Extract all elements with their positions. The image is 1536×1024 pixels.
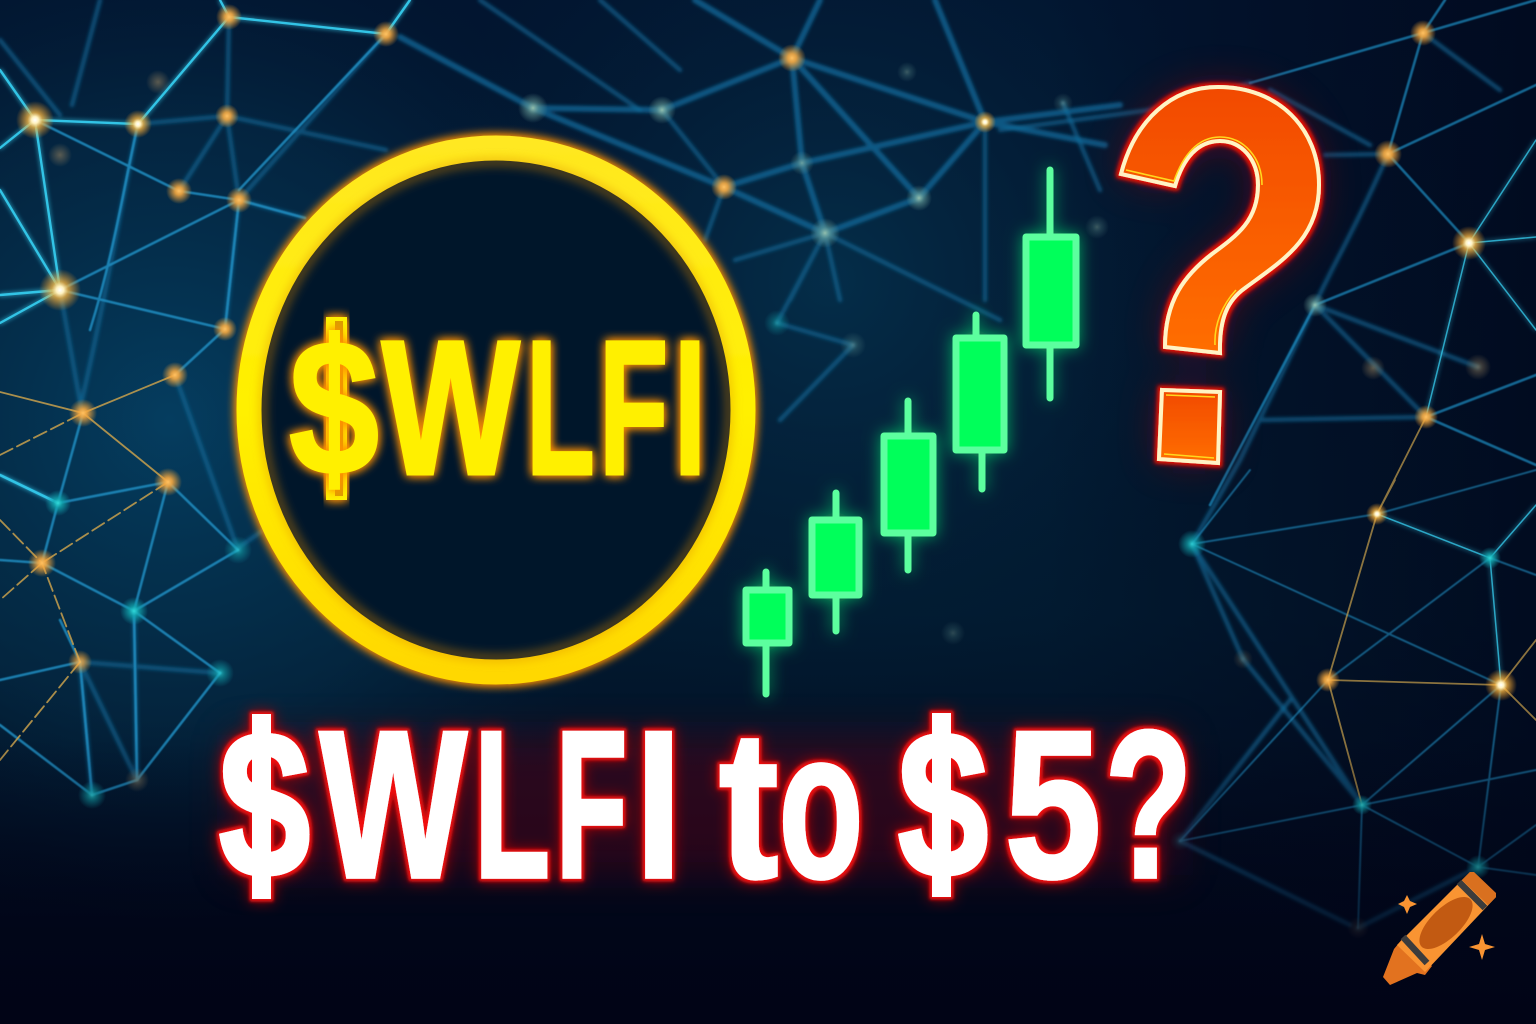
candle 2 — [812, 493, 859, 631]
title: I — [635, 687, 682, 922]
title — [218, 687, 1192, 922]
crayon body — [1397, 872, 1496, 972]
question mark yellow accents — [1126, 137, 1262, 458]
coin label: L — [526, 300, 595, 515]
title: W — [320, 687, 467, 922]
sparkle large — [1469, 934, 1495, 960]
candle 5 — [1026, 170, 1076, 398]
coin label: $ — [289, 300, 379, 515]
candle 1 — [746, 572, 789, 694]
candle 3 — [884, 401, 933, 570]
coin label: F — [599, 300, 668, 515]
crayon tip — [1383, 938, 1432, 985]
sparkle small — [1398, 895, 1417, 914]
title: $ — [898, 687, 988, 922]
crayon oval — [1411, 889, 1481, 957]
title: L — [474, 687, 550, 922]
coin — [249, 148, 743, 672]
coin label: I — [674, 300, 706, 515]
title: o — [779, 687, 863, 922]
title: $ — [218, 687, 310, 922]
question mark body — [1121, 87, 1319, 463]
candle 4 — [956, 315, 1004, 489]
question mark icon — [1121, 87, 1319, 463]
coin dollar bars — [326, 317, 347, 500]
title: ? — [1105, 687, 1192, 922]
crayon top cap — [1462, 872, 1496, 905]
candlestick chart — [746, 170, 1076, 694]
question mark halo — [1121, 87, 1319, 463]
crayon bands — [1403, 882, 1485, 963]
coin ring inner glow — [263, 162, 729, 658]
title: 5 — [1005, 687, 1101, 922]
coin label: W — [382, 300, 520, 515]
icon: crayon logo — [1383, 872, 1496, 985]
network: bright cyan lines — [0, 0, 1536, 685]
coin ring — [249, 148, 743, 672]
title: t — [719, 687, 778, 922]
network: gold lines — [0, 375, 1536, 805]
title: F — [556, 687, 627, 922]
title halo — [230, 735, 1180, 875]
